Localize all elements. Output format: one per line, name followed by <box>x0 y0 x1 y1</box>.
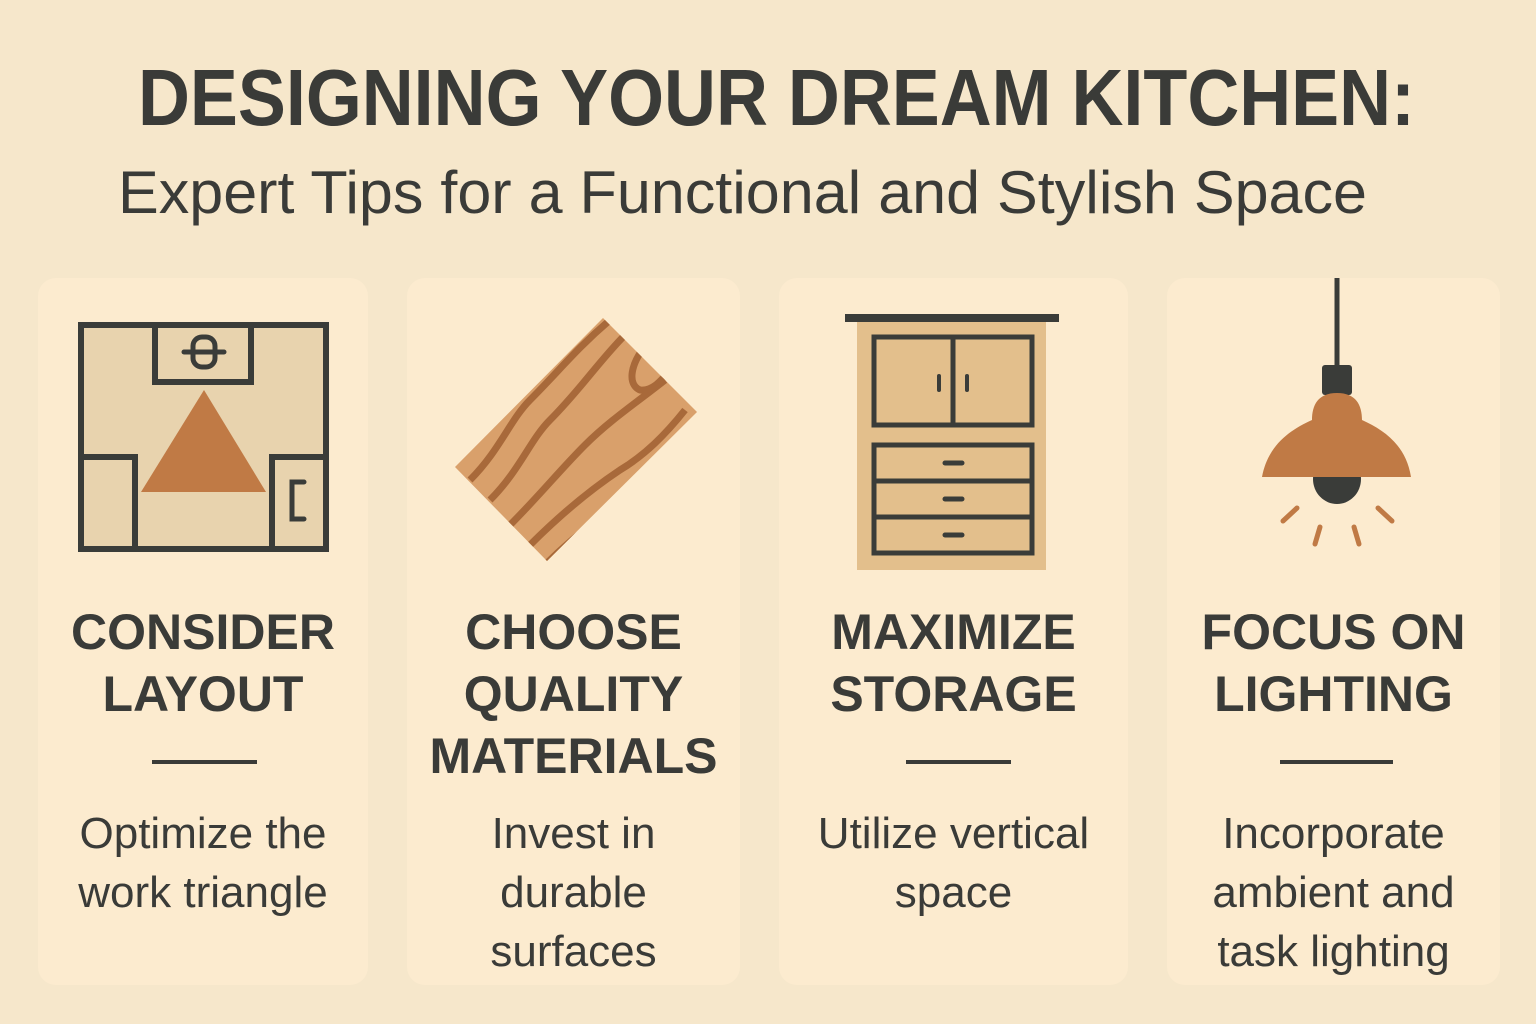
description: space <box>895 868 1012 917</box>
description: work triangle <box>78 868 328 917</box>
heading <box>71 604 335 722</box>
description: task lighting <box>1217 927 1450 976</box>
description: Incorporate <box>1222 809 1445 858</box>
heading: MATERIALS <box>430 728 717 784</box>
description: surfaces <box>490 927 657 976</box>
title <box>118 53 1415 226</box>
heading <box>830 604 1077 722</box>
heading: LIGHTING <box>1214 666 1453 722</box>
heading: CHOOSE <box>465 604 682 660</box>
heading <box>430 604 717 784</box>
icon: cabinet <box>845 314 1059 570</box>
heading: FOCUS ON <box>1202 604 1465 660</box>
heading <box>1202 604 1465 722</box>
panel: storage <box>779 278 1128 985</box>
panel: lighting <box>1167 278 1500 985</box>
panel: layout <box>38 278 368 985</box>
title: DESIGNING YOUR DREAM KITCHEN: <box>138 53 1415 142</box>
description: ambient and <box>1212 868 1455 917</box>
panel: materials <box>407 278 740 985</box>
description <box>490 809 657 976</box>
description: durable <box>500 868 647 917</box>
heading: LAYOUT <box>103 666 303 722</box>
icon: wood plank <box>455 318 697 561</box>
description: Invest in <box>492 809 655 858</box>
description: Utilize vertical <box>818 809 1089 858</box>
description <box>818 809 1089 917</box>
heading: MAXIMIZE <box>831 604 1076 660</box>
title: Expert Tips for a Functional and Stylish Space <box>118 159 1367 226</box>
icon: kitchen layout <box>78 322 329 552</box>
description <box>1212 809 1455 976</box>
heading: QUALITY <box>464 666 683 722</box>
heading: CONSIDER <box>71 604 335 660</box>
description <box>78 809 328 917</box>
heading: STORAGE <box>830 666 1077 722</box>
icon: pendant lamp <box>1262 278 1411 546</box>
description: Optimize the <box>80 809 326 858</box>
